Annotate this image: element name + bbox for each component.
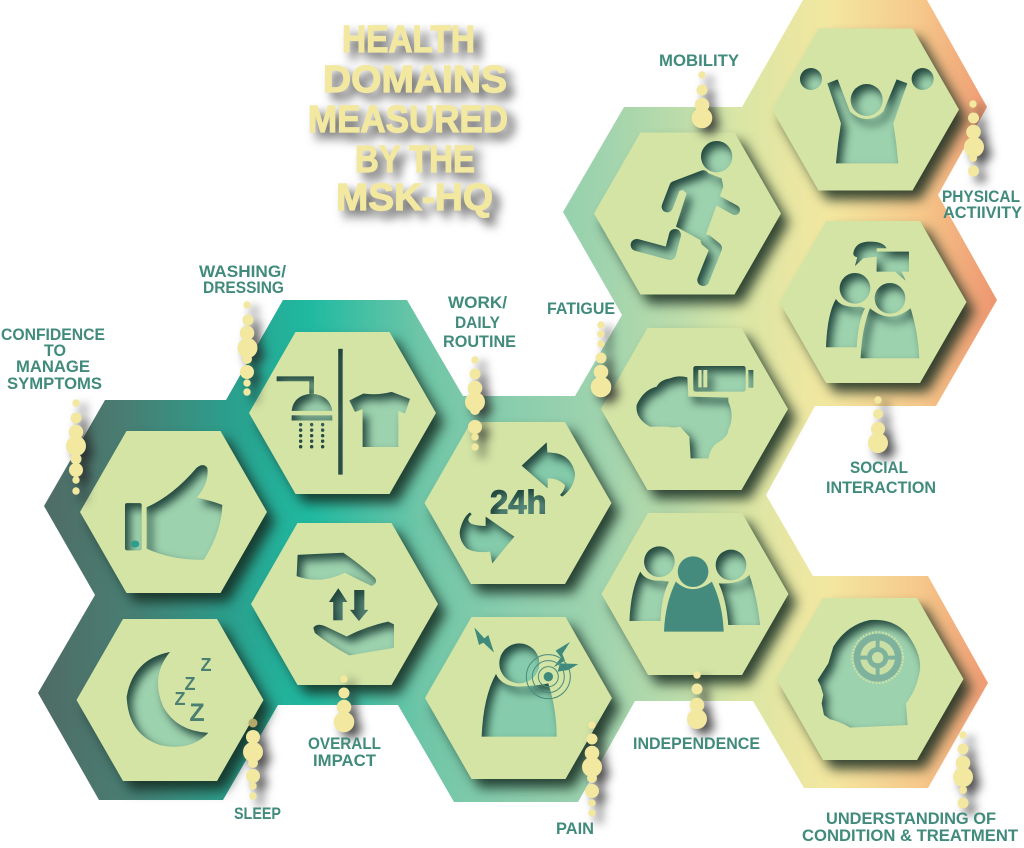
label: fatigue: FATIGUE xyxy=(547,299,615,318)
panel: confidence to manage symptoms xyxy=(80,431,267,593)
panel: understanding of condition and treatment xyxy=(776,598,964,760)
panel: social interaction xyxy=(780,221,966,383)
dots: overall impact xyxy=(334,675,354,732)
dots: mobility xyxy=(692,71,712,128)
label: mobility: MOBILITY xyxy=(659,51,740,70)
label: confidence to manage symptoms: MANAGE xyxy=(16,357,90,376)
label: work daily routine: DAILY xyxy=(455,313,501,332)
dots: sleep xyxy=(243,718,263,800)
label: overall impact: IMPACT xyxy=(313,751,377,770)
dots: confidence xyxy=(66,399,86,495)
panel: mobility xyxy=(594,132,781,294)
hexagon xyxy=(424,422,612,584)
icon: moon and Z letters: Z xyxy=(189,699,205,727)
hexagon xyxy=(76,619,264,781)
icon: moon and Z letters: Z xyxy=(184,674,196,694)
panel: sleep xyxy=(76,619,264,781)
label: sleep: SLEEP xyxy=(234,804,281,823)
hexagon xyxy=(772,28,959,190)
dots: understanding xyxy=(953,731,973,808)
title: MSK-HQ xyxy=(336,177,493,219)
panel: fatigue xyxy=(601,328,788,490)
hexagon xyxy=(601,328,788,490)
icon: runner xyxy=(637,141,735,280)
hexagon xyxy=(425,617,612,779)
hexagon xyxy=(602,513,788,675)
label: confidence to manage symptoms xyxy=(1,325,105,393)
dots: social interaction xyxy=(868,396,888,453)
dots: work and daily routine xyxy=(465,356,485,451)
dots: independence xyxy=(687,671,707,729)
label: confidence to manage symptoms: CONFIDENCE xyxy=(1,325,105,344)
title: MEASURED xyxy=(308,99,508,141)
icon: two people talking xyxy=(826,242,919,358)
label: understanding of condition and treatment: CONDITION & TREATMENT xyxy=(802,826,1019,845)
icon: three people xyxy=(630,546,760,632)
label: social interaction: SOCIAL xyxy=(850,458,908,477)
hexagon xyxy=(776,598,964,760)
label: social interaction xyxy=(826,458,936,497)
label: understanding of condition and treatment: UNDERSTANDING OF xyxy=(826,809,996,828)
title xyxy=(308,19,508,219)
panel: physical activity xyxy=(772,28,959,190)
icon: two hands with arrows xyxy=(297,553,394,655)
icon: head with gear xyxy=(818,620,920,728)
label: understanding of condition and treatment xyxy=(802,809,1019,845)
label: washing and dressing xyxy=(199,262,286,297)
label: work daily routine: ROUTINE xyxy=(443,332,516,351)
hexagon xyxy=(780,221,966,383)
label: confidence to manage symptoms: TO xyxy=(44,341,66,360)
label: social interaction: INTERACTION xyxy=(826,478,936,497)
label: overall impact xyxy=(308,734,381,770)
label: physical activity xyxy=(942,187,1023,222)
label: confidence to manage symptoms: SYMPTOMS xyxy=(7,374,102,393)
label: overall impact: OVERALL xyxy=(308,734,381,753)
icon: thumbs up xyxy=(125,465,222,560)
panel: washing and dressing xyxy=(249,332,436,494)
icon: moon and Z letters: Z xyxy=(200,655,212,675)
label: washing and dressing: WASHING/ xyxy=(199,262,286,281)
hexagon xyxy=(251,523,438,685)
title: HEALTH xyxy=(342,19,475,61)
panel: pain xyxy=(425,617,612,779)
icon: 24h with circular arrows: 24h xyxy=(490,484,547,521)
label: work daily routine xyxy=(443,293,516,351)
dots: physical activity xyxy=(964,100,984,176)
hexagon xyxy=(80,431,267,593)
panel: independence xyxy=(602,513,788,675)
hexagon xyxy=(594,132,781,294)
label: washing and dressing: DRESSING xyxy=(203,278,284,297)
dots: washing and dressing xyxy=(238,301,258,396)
icon: person with pain target xyxy=(474,627,578,737)
icon: person lifting weights xyxy=(800,68,934,163)
label: physical activity: ACTIIVITY xyxy=(943,203,1023,222)
title: BY THE xyxy=(355,139,475,181)
dots: pain xyxy=(582,721,602,817)
icon: 24h with circular arrows xyxy=(460,442,575,563)
label: pain: PAIN xyxy=(556,819,594,838)
icon: moon and Z letters xyxy=(127,652,212,747)
title: DOMAINS xyxy=(323,59,507,101)
panel: overall impact xyxy=(251,523,438,685)
label: independence: INDEPENDENCE xyxy=(633,734,760,753)
dots: fatigue xyxy=(591,321,611,397)
hexagon xyxy=(249,332,436,494)
panel: work and daily routine xyxy=(424,422,612,584)
label: work daily routine: WORK/ xyxy=(448,293,507,312)
icon: shower and t-shirt xyxy=(277,349,410,475)
icon: brain and low battery xyxy=(636,366,753,458)
icon: moon and Z letters: Z xyxy=(174,689,186,709)
